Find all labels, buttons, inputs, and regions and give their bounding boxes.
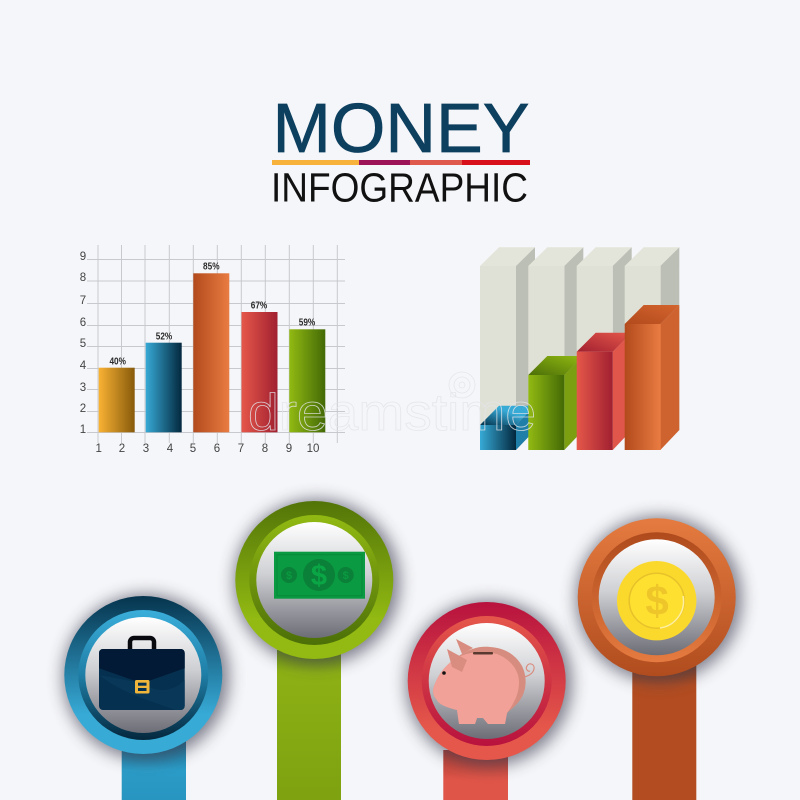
badge: coin xyxy=(576,516,742,682)
x axis labels: 5 xyxy=(190,443,196,455)
y axis labels: 1 xyxy=(80,424,86,436)
heading: INFOGRAPHIC: INFOGRAPHIC xyxy=(271,164,528,210)
grey back columns xyxy=(480,247,679,450)
y axis labels: 5 xyxy=(80,338,86,350)
x axis labels: 1 xyxy=(95,443,102,455)
icon: briefcase xyxy=(99,638,185,710)
icon: banknote: $ xyxy=(311,560,327,592)
x axis labels: 4 xyxy=(167,443,174,455)
x axis labels: 2 xyxy=(119,443,125,455)
strip: orange xyxy=(632,665,696,800)
strip: green xyxy=(277,650,341,800)
y axis labels: 4 xyxy=(80,360,87,372)
bar value labels: 52% xyxy=(156,330,173,342)
blue column xyxy=(480,406,535,450)
x axis labels: 10 xyxy=(307,443,319,455)
y axis labels: 7 xyxy=(80,295,86,307)
y axis labels xyxy=(80,251,87,436)
icon: piggy bank xyxy=(433,639,534,724)
bars xyxy=(99,273,325,432)
x axis labels xyxy=(95,443,319,455)
icon: banknote xyxy=(274,552,365,599)
bar value labels xyxy=(109,260,316,368)
red column xyxy=(577,333,632,450)
strip: red xyxy=(443,750,508,800)
bar value labels: 85% xyxy=(203,260,220,272)
3D bar chart xyxy=(480,247,679,450)
icon: banknote: $ xyxy=(286,570,292,582)
watermark: dreamstime xyxy=(248,384,536,442)
icon: coin: $ xyxy=(645,577,669,624)
title colour stripe xyxy=(272,160,530,165)
y axis labels: 3 xyxy=(80,382,86,394)
strip: blue xyxy=(122,740,186,800)
y axis labels: 8 xyxy=(80,272,86,284)
x axis labels: 6 xyxy=(214,443,220,455)
title xyxy=(271,89,530,210)
green column xyxy=(528,356,583,450)
y axis labels: 2 xyxy=(80,403,86,415)
bar value labels: 59% xyxy=(299,316,316,328)
x axis labels: 8 xyxy=(262,443,268,455)
y axis labels: 9 xyxy=(80,251,86,263)
bar value labels: 67% xyxy=(251,300,268,312)
badge: piggy bank xyxy=(406,600,572,766)
orange column xyxy=(625,305,679,450)
badge: briefcase xyxy=(63,594,229,760)
y axis labels: 6 xyxy=(80,317,86,329)
badge: banknote xyxy=(234,499,400,665)
heading: MONEY: MONEY xyxy=(272,89,530,167)
x axis labels: 3 xyxy=(143,443,149,455)
icon: banknote: $ xyxy=(343,570,349,582)
bar value labels: 40% xyxy=(109,356,126,368)
icon: coin xyxy=(617,561,696,640)
x axis labels: 7 xyxy=(238,443,244,455)
bar chart: percentages xyxy=(80,245,345,455)
x axis labels: 9 xyxy=(286,443,292,455)
